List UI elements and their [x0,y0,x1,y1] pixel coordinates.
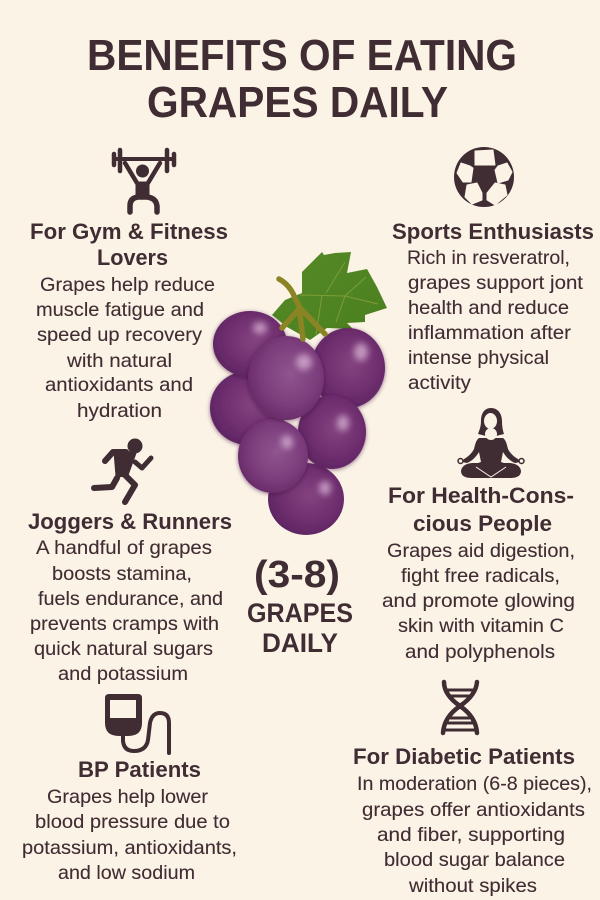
icon: meditating woman [458,408,524,478]
block: health-conscious people: skin with vitamin C [398,615,564,637]
block: joggers and runners: boosts stamina, [52,563,192,585]
callout: 3-8 grapes daily: DAILY [262,628,338,658]
block: joggers and runners: and potassium [58,663,188,685]
block: health-conscious people: and promote glowing [382,590,575,612]
block: joggers and runners [28,509,232,685]
block: diabetic patients: blood sugar balance [384,849,565,871]
block: bp patients: and low sodium [58,862,195,884]
block: health-conscious people: cious People [413,511,552,536]
block: gym and fitness [30,219,228,422]
callout: 3-8 grapes daily: (3-8) [254,554,340,596]
block: gym and fitness: Grapes help reduce [40,274,215,296]
block: sports enthusiasts: health and reduce [408,297,569,319]
block: gym and fitness: Lovers [97,245,168,270]
stem [279,279,325,339]
berries [210,311,385,535]
block: diabetic patients: without spikes [408,875,537,897]
block: diabetic patients: In moderation (6-8 pieces), [357,773,592,795]
block: gym and fitness: For Gym & Fitness [30,219,228,244]
block: gym and fitness: muscle fatigue and [36,299,204,321]
block: diabetic patients [353,744,592,897]
block: bp patients: BP Patients [78,757,201,782]
block: diabetic patients: grapes offer antioxidants [362,799,585,821]
block: joggers and runners: Joggers & Runners [28,509,232,534]
block: health-conscious people: For Health-Cons- [388,483,574,508]
block: health-conscious people: fight free radicals, [401,565,560,587]
icon: soccer ball [454,147,514,207]
block: joggers and runners: fuels endurance, and [38,588,223,610]
block: joggers and runners: prevents cramps with [30,613,219,635]
icon: blood pressure bag [105,694,169,753]
block: health-conscious people: and polyphenols [405,641,555,663]
block: diabetic patients: For Diabetic Patients [353,744,575,769]
block: health-conscious people: Grapes aid digestion, [387,540,575,562]
icon: dna helix [443,682,477,733]
illustration: grape bunch [210,252,387,535]
block: sports enthusiasts: activity [408,372,471,394]
block: bp patients [22,757,237,884]
block: bp patients: blood pressure due to [35,811,230,833]
block: sports enthusiasts: grapes support jont [408,272,584,294]
block: gym and fitness: with natural [66,350,172,372]
block: gym and fitness: hydration [77,400,162,422]
callout: 3-8 grapes daily [247,554,353,658]
block: sports enthusiasts: inflammation after [408,322,572,344]
title: BENEFITS OF EATING [87,31,517,80]
block: gym and fitness: speed up recovery [37,324,202,346]
block: bp patients: potassium, antioxidants, [22,837,237,859]
block: diabetic patients: and fiber, supporting [377,824,565,846]
block: sports enthusiasts: Sports Enthusiasts [392,219,594,244]
block: joggers and runners: quick natural sugars [34,638,213,660]
icon: weightlifter [114,150,174,212]
block: gym and fitness: antioxidants and [45,374,193,396]
block: joggers and runners: A handful of grapes [36,537,212,559]
block: bp patients: Grapes help lower [47,786,209,808]
title: GRAPES DAILY [147,78,448,127]
title [87,31,517,127]
block: sports enthusiasts: Rich in resveratrol, [407,247,570,269]
icon: runner [94,438,151,502]
block: sports enthusiasts [392,219,594,394]
block: health-conscious people [382,483,575,663]
leaf [272,252,387,340]
block: sports enthusiasts: intense physical [408,347,549,369]
callout: 3-8 grapes daily: GRAPES [247,598,353,628]
